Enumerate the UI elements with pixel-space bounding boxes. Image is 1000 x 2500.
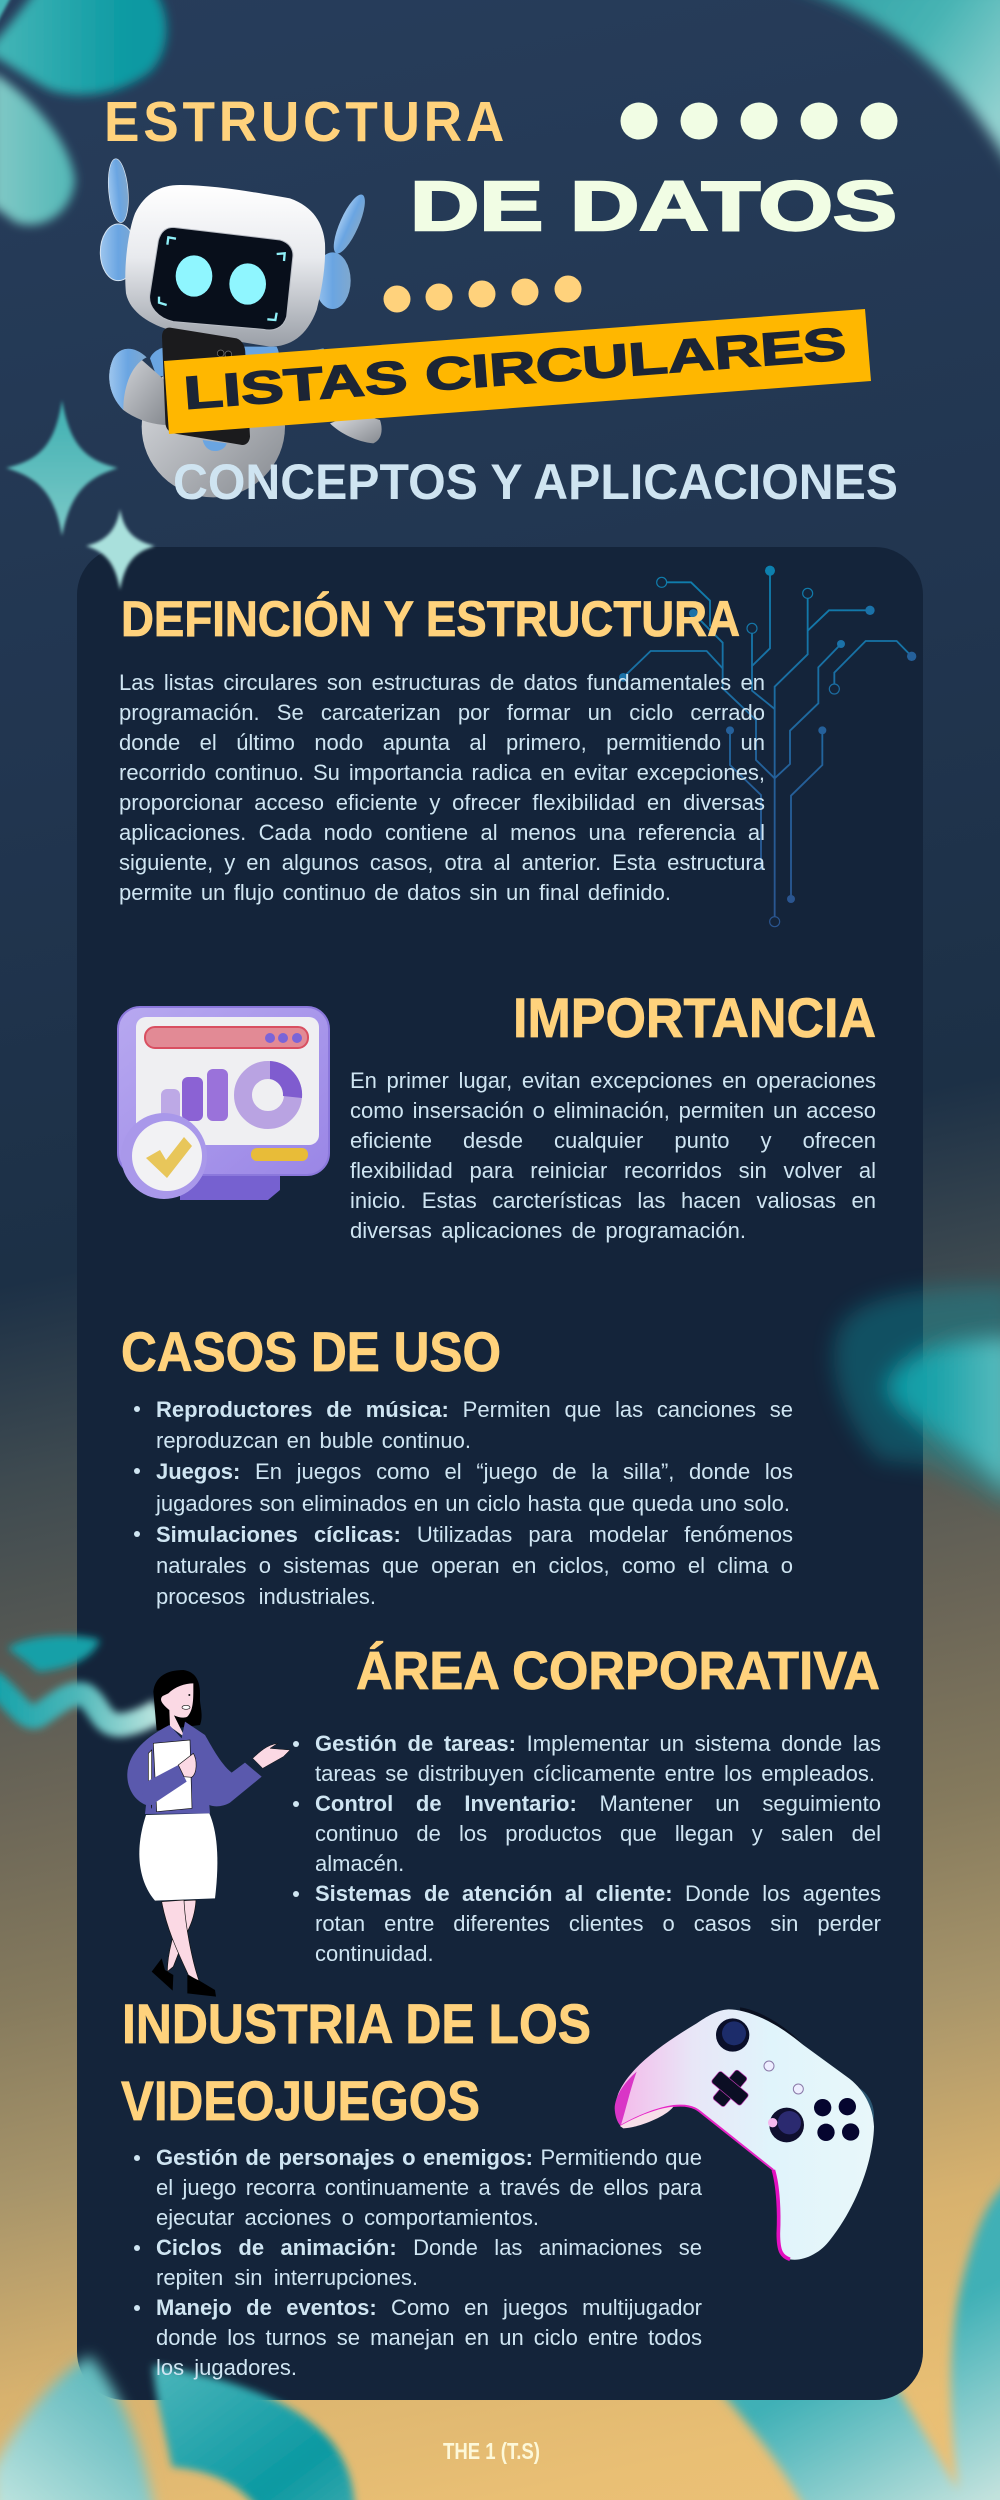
- text block: definition paragraph: siguiente, y en algunos casos, otra al anterior. Esta estructura: [119, 850, 765, 875]
- illustration: game controller: [615, 2007, 874, 2260]
- list: video game industry: el juego recorra continuamente a través de ellos para: [156, 2175, 702, 2200]
- illustration: businesswoman presenting: [127, 1670, 290, 1997]
- text block: definition paragraph: programación. Se carcaterizan por formar un ciclo cerrado: [119, 700, 765, 725]
- list: use cases: Simulaciones cíclicas: Utilizadas para modelar fenómenos: [156, 1522, 793, 1547]
- subtitle: conceptos y aplicaciones: CONCEPTOS Y APLICACIONES: [173, 454, 898, 510]
- list: use cases: Reproductores de música: Permiten que las canciones se: [156, 1397, 793, 1422]
- heading: area corporativa: ÁREA CORPORATIVA: [356, 1641, 880, 1701]
- heading: industria de los videojuegos: [121, 1992, 591, 2132]
- heading: casos de uso: CASOS DE USO: [121, 1320, 501, 1383]
- panel: dark content card: [77, 547, 923, 2400]
- list: video game industry: repiten sin interrupciones.: [156, 2265, 418, 2290]
- list: video game industry: Manejo de eventos: Como en juegos multijugador: [156, 2295, 702, 2320]
- list: video game industry: los jugadores.: [156, 2355, 297, 2380]
- icon: large four-point star: [6, 400, 118, 536]
- heading: importancia: IMPORTANCIA: [513, 986, 876, 1049]
- illustration: dashboard monitor icon: [118, 1007, 329, 1200]
- icon: small four-point star: [86, 509, 155, 590]
- list: corporate area: continuidad.: [315, 1941, 434, 1966]
- heading: estructura: ESTRUCTURA: [104, 90, 508, 154]
- list: use cases: Juegos: En juegos como el “juego de la silla”, donde los: [156, 1459, 793, 1484]
- list: video game industry: donde los turnos se manejan en un ciclo entre todos: [156, 2325, 702, 2350]
- text block: importance paragraph: [350, 1068, 876, 1243]
- text block: importance paragraph: inicio. Estas carcterísticas las hacen valiosas en: [350, 1188, 876, 1213]
- text block: importance paragraph: flexibilidad para reiniciar recorridos sin volver al: [350, 1158, 876, 1183]
- dots: five cream dots: [620, 102, 898, 140]
- banner: yellow ribbon with title: LISTAS CIRCULARES: [182, 317, 848, 419]
- text block: definition paragraph: proporcionar acceso eficiente y ofrecer flexibilidad en diversas: [119, 790, 765, 815]
- text block: definition paragraph: aplicaciones. Cada nodo contiene al menos una referencia al: [119, 820, 765, 845]
- list: corporate area: Gestión de tareas: Implementar un sistema donde las: [315, 1731, 881, 1756]
- credit: author: THE 1 (T.S): [443, 2438, 540, 2464]
- heading: de datos: DE DATOS: [410, 167, 897, 245]
- text block: importance paragraph: como insersación o eliminación, permiten un acceso: [350, 1098, 876, 1123]
- list: video game industry: Gestión de personajes o enemigos: Permitiendo que: [156, 2145, 702, 2170]
- list: video game industry: ejecutar acciones o comportamientos.: [156, 2205, 539, 2230]
- list: use cases: reproduzcan en buble continuo.: [156, 1428, 471, 1453]
- decorative blob: top-left petals: [0, 0, 166, 225]
- text block: definition paragraph: Las listas circulares son estructuras de datos fundamentales en: [119, 670, 765, 695]
- list: corporate area: continuo de los productos que llegan y salen del: [315, 1821, 881, 1846]
- list: corporate area: almacén.: [315, 1851, 404, 1876]
- decorative blob: right middle: [834, 1285, 1000, 1510]
- text block: importance paragraph: En primer lugar, evitan excepciones en operaciones: [350, 1068, 876, 1093]
- text block: definition paragraph: recorrido continuo. Su importancia radica en evitar excepciones,: [119, 760, 765, 785]
- list: use cases: naturales o sistemas que operan en ciclos, como el clima o: [156, 1553, 793, 1578]
- decorative blob: bottom-left petals: [0, 2355, 355, 2500]
- illustration: circuit tree: [619, 566, 916, 927]
- decorative blob: top-right corner: [790, 0, 1000, 172]
- list: corporate area: tareas se distribuyen cíclicamente entre los empleados.: [315, 1761, 875, 1786]
- heading: industria de los videojuegos: VIDEOJUEGOS: [121, 2069, 480, 2132]
- heading: definicion y estructura: DEFINCIÓN Y ESTRUCTURA: [121, 591, 740, 647]
- decorative blob: left wave: [0, 1636, 160, 1725]
- list: use cases: [134, 1397, 793, 1609]
- list: corporate area: rotan entre diferentes clientes o casos sin perder: [315, 1911, 881, 1936]
- list: corporate area: Sistemas de atención al cliente: Donde los agentes: [315, 1881, 881, 1906]
- heading: industria de los videojuegos: INDUSTRIA DE LOS: [122, 1992, 591, 2055]
- list: corporate area: [293, 1731, 881, 1966]
- list: use cases: procesos industriales.: [156, 1584, 376, 1609]
- banner: yellow ribbon with title: [164, 309, 871, 434]
- text block: definition paragraph: [119, 670, 765, 905]
- dots: five orange dots: [384, 276, 582, 312]
- text block: definition paragraph: donde el último nodo apunta al primero, permitiendo un: [119, 730, 765, 755]
- text block: importance paragraph: diversas aplicaciones de programación.: [350, 1218, 746, 1243]
- list: corporate area: Control de Inventario: Mantener un seguimiento: [315, 1791, 881, 1816]
- list: use cases: jugadores son eliminados en un ciclo hasta que queda uno solo.: [156, 1491, 790, 1516]
- list: video game industry: Ciclos de animación: Donde las animaciones se: [156, 2235, 702, 2260]
- text block: definition paragraph: permite un flujo continuo de datos sin un final definido.: [119, 880, 671, 905]
- text block: importance paragraph: eficiente desde cualquier punto y ofrecen: [350, 1128, 876, 1153]
- illustration: robot holding phone: [100, 158, 382, 497]
- list: video game industry: [134, 2145, 702, 2380]
